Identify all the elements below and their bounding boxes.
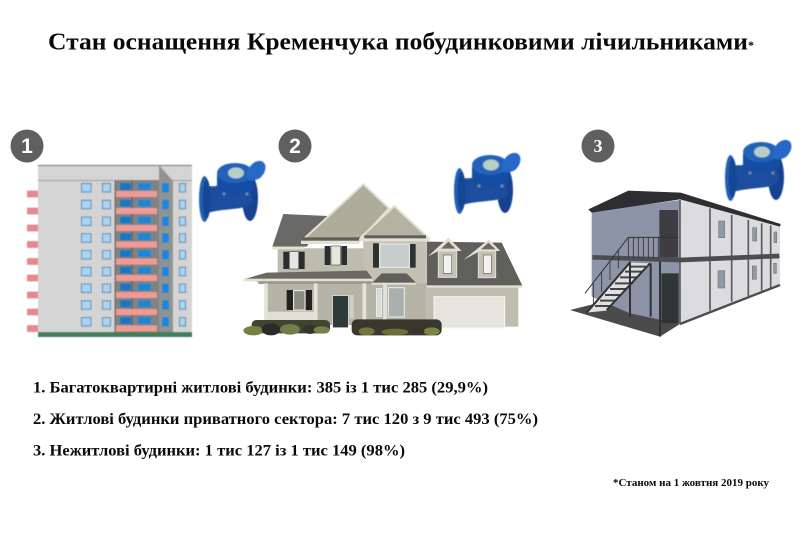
footnote: *Станом на 1 жовтня 2019 року bbox=[613, 478, 770, 489]
statistic 1: 1. Багатоквартирні житлові будинки: 385 із 1 тис 285 (29,9%) bbox=[33, 380, 488, 396]
statistic 2: 2. Житлові будинки приватного сектора: 7 тис 120 з 9 тис 493 (75%) bbox=[33, 411, 538, 428]
icon: water meter 3 bbox=[725, 140, 791, 201]
number badge 3 bbox=[582, 130, 614, 162]
icon: water meter 1 bbox=[199, 161, 265, 222]
number badge 1: 1 bbox=[21, 135, 33, 158]
number badge 2: 2 bbox=[289, 135, 301, 158]
statistic 3: 3. Нежитлові будинки: 1 тис 127 із 1 тис 149 (98%) bbox=[33, 442, 405, 460]
number badge 3: 3 bbox=[594, 136, 602, 156]
modular non-residential building bbox=[570, 191, 781, 337]
private house bbox=[243, 184, 523, 335]
number badge 1 bbox=[10, 130, 44, 162]
list of statistics bbox=[33, 380, 538, 460]
shrubs bbox=[243, 319, 442, 335]
title: Стан оснащення Кременчука побудинковими лічильниками bbox=[48, 28, 748, 56]
apartment building bbox=[27, 165, 192, 337]
icon: water meter 2 bbox=[454, 153, 520, 214]
title: * bbox=[748, 38, 754, 52]
number badge 2 bbox=[278, 130, 312, 162]
